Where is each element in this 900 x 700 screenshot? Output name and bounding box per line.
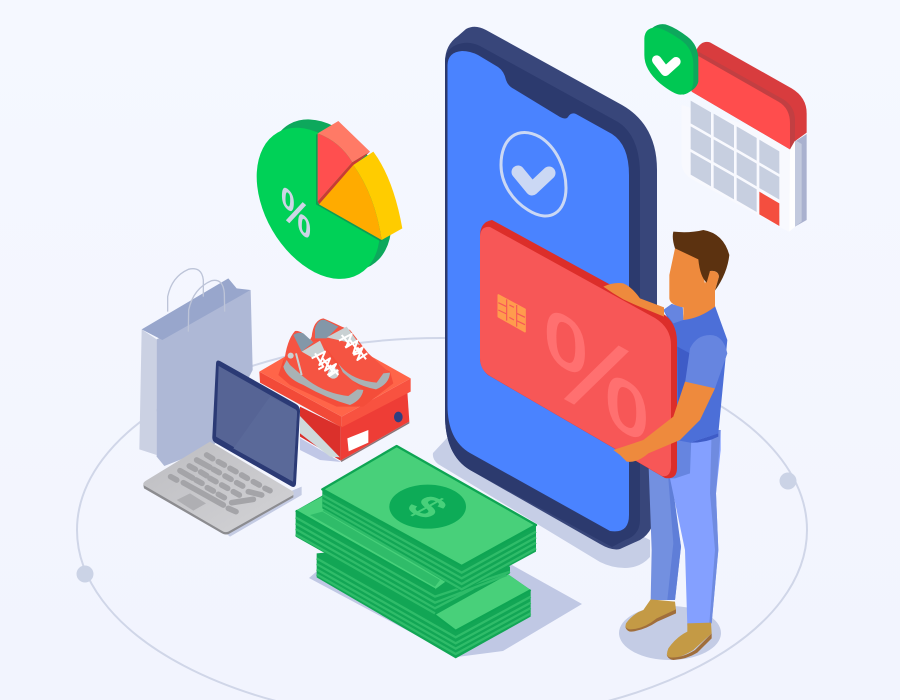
- sneakers: [283, 318, 390, 405]
- screen check badge: [501, 133, 566, 216]
- shopping bag: [139, 269, 253, 466]
- box label: [347, 430, 368, 451]
- phone screen: [448, 51, 629, 531]
- dollar sign: $: [395, 489, 459, 525]
- money shadow: [309, 560, 582, 657]
- back shoe: [625, 599, 676, 632]
- back sneaker: [310, 318, 390, 389]
- top stack: [322, 446, 536, 592]
- pie chart: [231, 98, 417, 301]
- upper hand and arm: [603, 283, 664, 317]
- calendar body: [682, 105, 807, 232]
- box body: [300, 407, 341, 461]
- back leg: [648, 440, 681, 600]
- lower arm and hand: [613, 382, 715, 462]
- percent on pie: %: [280, 174, 312, 251]
- calendar: [682, 42, 807, 232]
- bottom stack: [317, 547, 531, 658]
- man: legs and shoes: [625, 430, 721, 660]
- orbit ring with dots: [76, 338, 807, 700]
- pie green slice: [231, 106, 405, 301]
- man: feet shadow: [619, 606, 721, 660]
- box lid: [259, 372, 342, 427]
- front sneaker: [283, 331, 363, 405]
- pie slice edge: [316, 134, 382, 242]
- green check badge: [644, 24, 698, 95]
- hair: [673, 230, 729, 291]
- smartphone: [445, 27, 657, 549]
- shoebox shadow: [300, 438, 341, 462]
- card chip: [498, 295, 525, 332]
- bag handles: [168, 269, 225, 332]
- shirt: [663, 304, 727, 443]
- yellow slice: [319, 152, 402, 240]
- keyboard: [171, 455, 270, 512]
- man: torso and head: [663, 230, 729, 443]
- pocket panel: [668, 430, 692, 478]
- shoebox: [259, 333, 411, 462]
- stacks of banknotes: [296, 446, 536, 658]
- phone shadow: [433, 438, 650, 568]
- calendar grid: [691, 101, 779, 212]
- card percent symbol: %: [543, 279, 650, 472]
- front leg: [670, 430, 721, 626]
- front shoe: [667, 623, 712, 658]
- calendar header: [697, 42, 807, 143]
- laptop screen: [212, 360, 300, 487]
- highlighted date: [759, 192, 779, 226]
- man: arms over card: [603, 283, 727, 462]
- laptop: [143, 360, 302, 537]
- laptop shadow: [213, 487, 302, 537]
- pie side: [243, 98, 417, 292]
- red slice: [318, 121, 370, 204]
- credit card: [480, 220, 677, 478]
- trackpad: [177, 493, 206, 511]
- laptop base: [143, 442, 294, 532]
- face and neck: [669, 248, 719, 320]
- middle stack: [296, 495, 510, 615]
- sleeve: [685, 335, 727, 388]
